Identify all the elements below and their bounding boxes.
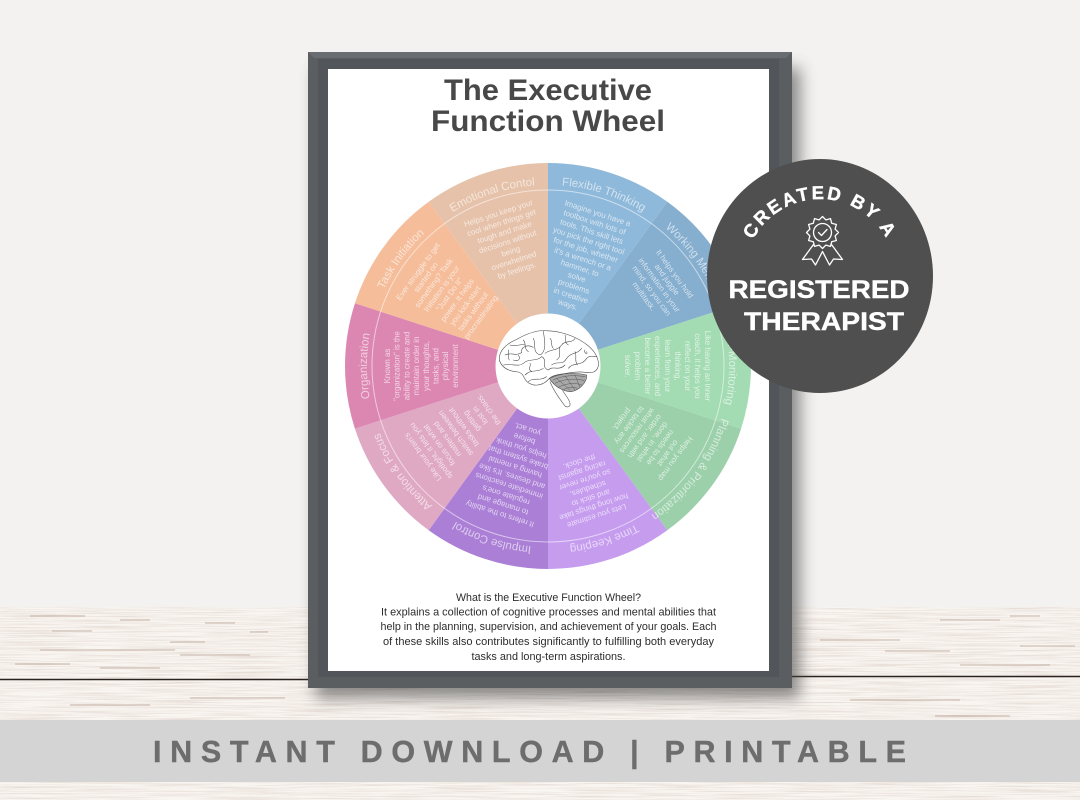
sector: Self-Monitoring: thinking, (673, 351, 682, 381)
sector: Task Initiation: something? Task (413, 256, 455, 310)
sector: Organization: "organization" is the (393, 331, 402, 401)
sector: Self-Monitoring: Self-Monitoring (723, 345, 738, 405)
sector: Organization: Organization (358, 334, 370, 399)
sector: Impulse Control (452, 421, 549, 554)
sector: Attention and Focus: matters and (432, 420, 463, 459)
title (431, 74, 665, 138)
sector: Attention and Focus: spotlight, it lets you (408, 421, 455, 481)
sector: Organization: tasks, and (432, 348, 440, 384)
sector: Flexible Thinking: for the job, whether (552, 235, 620, 265)
sector: Attention and Focus: focus on what (421, 422, 457, 467)
sector: Organization: physical (441, 352, 450, 380)
sector: Task Initiation: you kick-start (448, 284, 483, 327)
sector: Time Keeping: so you're never (558, 467, 612, 492)
picture frame (308, 52, 792, 688)
sector: Flexible Thinking: ways. (556, 297, 579, 312)
sector: Planning and Prioritization: project. (610, 406, 633, 433)
sector: Self-Monitoring (623, 331, 738, 405)
sector: Attention and Focus: the chaos. (474, 392, 503, 427)
sector: Self-Monitoring: problem (633, 352, 642, 381)
sector: Emotional Control: Helps you keep your (463, 198, 534, 229)
banner: instant download printable (0, 720, 1080, 782)
sector: Impulse Control: Impulse Control (452, 522, 530, 554)
sector: Impulse Control: brake system that (487, 443, 549, 471)
sector: Flexible Thinking: hammer, to (560, 258, 601, 279)
sector: Flexible Thinking: toolbox with lots of (562, 208, 628, 237)
sector: Organization: environment (451, 343, 460, 388)
explanatory paragraph: tasks and long-term aspirations. (472, 651, 626, 663)
sector: Working Memory: Working Memory (667, 222, 708, 280)
sector: Planning and Prioritization: Helps you map (656, 435, 695, 483)
banner: instant download printable: INSTANT DOWNLOAD | PRINTABLE (153, 735, 906, 769)
sector: Time Keeping: schedules, (569, 479, 607, 499)
sector: Impulse Control: having a mental (487, 454, 543, 480)
sector: Emotional Control: Emotional Contol (449, 177, 534, 212)
sector: Attention and Focus: Attention & Focus (374, 434, 432, 510)
sector: Flexible Thinking: you pick the right tool (552, 225, 626, 257)
wooden table (0, 607, 1080, 800)
explanatory paragraph: help in the planning, supervision, and achievement of your goals. Each (380, 621, 716, 633)
sector: Flexible Thinking: problems (557, 277, 591, 296)
sector: Emotional Control: tough and make (476, 219, 533, 245)
explanatory paragraph: What is the Executive Function Wheel? (456, 592, 641, 604)
sector: Attention and Focus (374, 392, 503, 510)
explanatory paragraph: of these skills also contributes significantly to fulfilling both everyday (383, 636, 714, 648)
sector: Impulse Control: and desires. It's like (477, 461, 546, 491)
sector: Planning and Prioritization: order, and with (626, 413, 664, 460)
sector: Task Initiation: power. It helps (439, 277, 476, 323)
sector: Organization: maintain order in (412, 337, 421, 395)
sector: Time Keeping: the clock. (562, 452, 596, 471)
sector: Flexible Thinking: tools. This skill lets (559, 217, 624, 246)
sector: Flexible Thinking (552, 178, 646, 312)
sector: Flexible Thinking: in creative (552, 286, 590, 306)
title: The Executive (444, 74, 652, 107)
icon: rosette with check (802, 216, 842, 265)
sector: Planning and Prioritization (610, 405, 729, 519)
sector: Impulse Control: helps you think (495, 436, 548, 460)
sector: Working Memory (630, 222, 708, 318)
sector: Attention and Focus: switch between (436, 409, 475, 458)
sector: Self-Monitoring: Like having an inner (703, 331, 712, 402)
sector: Working Memory: It helps you hold (654, 248, 695, 300)
sector: Attention and Focus: Like your brain's (403, 431, 443, 483)
sector: Organization: Known as (383, 349, 392, 383)
sector: Time Keeping: Lets you estimate (565, 502, 627, 530)
sector: Working Memory: mind, so you can (630, 264, 673, 318)
sector: Working Memory: multitask. (630, 280, 657, 312)
sector: Impulse Control: you act. (513, 421, 542, 438)
sector: Planning and Prioritization: Planning & Prioritization (652, 418, 729, 519)
sector: Self-Monitoring: reflect on your (683, 341, 692, 391)
icon: brain (499, 331, 598, 407)
explanatory paragraph (380, 592, 716, 663)
sector: Organization: your thoughts, (422, 341, 431, 391)
sector: Impulse Control: regulate one's (481, 483, 531, 507)
sector: Working Memory: information in your (637, 256, 682, 314)
sector: Time Keeping: how long things take (558, 491, 629, 522)
sector: Emotional Control: by feelings. (497, 260, 537, 281)
sector: Task Initiation: Ever struggle to get (394, 241, 442, 302)
sector: Working Memory: and juggle (653, 262, 682, 297)
explanatory paragraph: It explains a collection of cognitive processes and mental abilities that (381, 606, 716, 618)
sector: Task Initiation: "Just Do It" (434, 276, 465, 313)
badge main text: REGISTERED (728, 276, 910, 304)
sector: Time Keeping (556, 452, 640, 552)
frame shadow (316, 68, 800, 698)
badge main text (728, 276, 910, 336)
sector: Time Keeping: racing against (556, 459, 607, 483)
badge arc text: CREATED BY A (744, 186, 894, 238)
sector: Self-Monitoring: coach, it helps you (693, 333, 702, 399)
sector: Attention and Focus: getting (461, 409, 483, 433)
sector: Self-Monitoring: solver. (623, 355, 632, 377)
sector: Flexible Thinking: Flexible Thinking (562, 178, 646, 213)
sector: Attention and Focus: lost in (471, 404, 490, 426)
sector: Emotional Control: decisions without (478, 228, 538, 255)
sector: Self-Monitoring: become a better (643, 337, 652, 395)
sector: Organization: ability to create and (402, 332, 411, 400)
sector: Self-Monitoring: experiences, and (653, 336, 662, 396)
wheel hub (496, 314, 600, 418)
wheel sectors (318, 132, 778, 600)
title: Function Wheel (431, 105, 665, 138)
sector: Flexible Thinking: it's a wrench or a (553, 246, 613, 273)
sector: Planning and Prioritization: out what (655, 438, 680, 468)
sector: Flexible Thinking: solve (567, 270, 588, 285)
sector: Organization (358, 331, 460, 401)
sector: Planning and Prioritization: done, in what (634, 420, 670, 464)
sector: Emotional Control: cool when things get (466, 207, 538, 238)
sector: Task Initiation: Initiation is your (422, 264, 462, 314)
sector: Flexible Thinking: Imagine you have a (563, 198, 632, 228)
sector: Impulse Control: It refers to the ability (465, 499, 535, 529)
sector: Task Initiation: Task Initiation (377, 230, 424, 287)
sector: Task Initiation: tasks without (456, 290, 491, 333)
sector: Planning and Prioritization: what resources (618, 406, 657, 455)
sector: Task Initiation: started on (412, 261, 440, 294)
sector: Impulse Control: immediate reactions (474, 470, 544, 501)
sector: Planning and Prioritization: needs to be (644, 428, 676, 467)
sector: Planning and Prioritization: to tackle any (613, 405, 646, 446)
wall background (0, 0, 1080, 607)
sector: Task Initiation (377, 230, 500, 341)
sector: Emotional Control (449, 177, 538, 281)
executive function wheel (345, 163, 751, 569)
sector: Impulse Control: before (512, 431, 536, 446)
badge main text: THERAPIST (744, 308, 904, 336)
sector: Emotional Control: overwhelmed (490, 249, 538, 272)
sector: Emotional Control: being (500, 244, 521, 259)
sector: Attention and Focus: tasks without (446, 405, 481, 448)
sector: Impulse Control: to manage and (477, 492, 529, 517)
sector: Self-Monitoring: learn from your (663, 339, 672, 393)
sector: Task Initiation: procrastinating (462, 294, 500, 341)
badge: created by a registered therapist (707, 159, 933, 393)
sector: Time Keeping: and stick to (570, 487, 611, 508)
sector: Time Keeping: Time Keeping (570, 526, 640, 552)
